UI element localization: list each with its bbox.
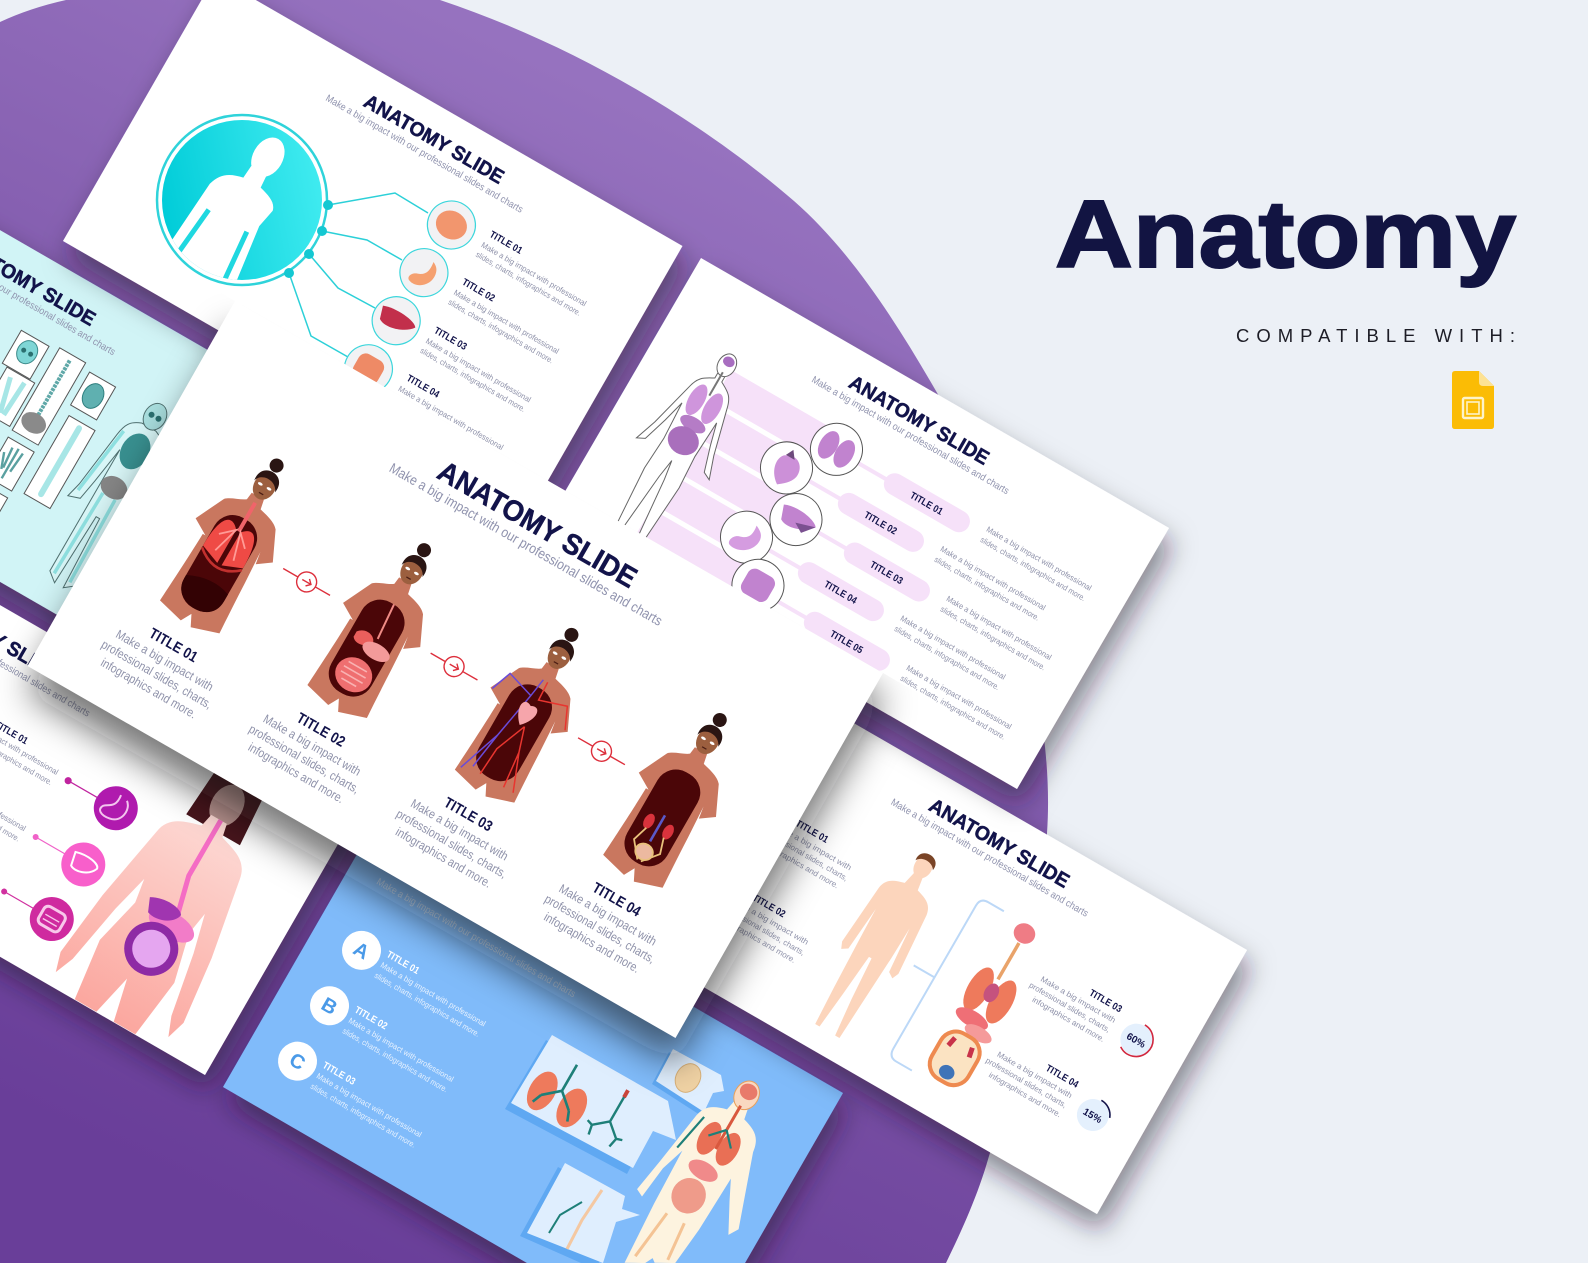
pill: title 04 bbox=[794, 558, 888, 625]
icon: liver bbox=[363, 288, 429, 353]
body figure with organs bbox=[44, 744, 304, 1052]
text block: title 04: Make a big impact with professional bbox=[397, 384, 505, 452]
description texts: slides, charts, infographics and more. bbox=[893, 624, 1001, 692]
text block: title 01: TITLE 01 bbox=[487, 229, 524, 257]
connector lines bbox=[289, 193, 428, 357]
figure 3: circulatory bbox=[442, 607, 614, 816]
icon: stomach bbox=[711, 502, 782, 573]
arrow 1 bbox=[278, 560, 335, 604]
progress ring: 60% bbox=[1114, 1017, 1159, 1063]
icon: intestine circle bbox=[22, 889, 82, 949]
pill: title 03: TITLE 03 bbox=[868, 560, 905, 587]
purple arch shape bbox=[0, 0, 1048, 1263]
icon: arm bones bbox=[0, 375, 24, 416]
text block: title 01: professional slides, charts, bbox=[99, 637, 214, 712]
text block: title 04: TITLE 04 bbox=[404, 373, 441, 401]
text block: title 03: slides, charts, infographics and more. bbox=[419, 346, 527, 414]
text block: title 03: TITLE 03 bbox=[432, 325, 469, 353]
text block: title 02: professional slides, charts, bbox=[722, 904, 806, 957]
description texts: Make a big impact with professional bbox=[945, 594, 1053, 662]
text block: title 01: infographics and more. bbox=[763, 841, 840, 890]
text block: title 02: TITLE 02 bbox=[750, 893, 787, 920]
description texts: slides, charts, infographics and more. bbox=[899, 674, 1007, 742]
pill: title 02 bbox=[834, 489, 928, 556]
heading: ANATOMY SLIDE bbox=[925, 795, 1073, 893]
text block: title 01: TITLE 01 bbox=[384, 949, 421, 977]
callout: lungs bbox=[505, 1035, 676, 1174]
text block: title 03: Make a big impact with professional bbox=[424, 337, 533, 404]
description texts: Make a big impact with professional bbox=[905, 663, 1013, 731]
slide: digestive body (white and magenta) bbox=[0, 541, 357, 1075]
lilac bands bbox=[634, 370, 896, 634]
text block: title 02: Make a big impact with professional bbox=[347, 1016, 455, 1084]
arrow 2 bbox=[426, 644, 482, 689]
text block: title 03 bbox=[386, 776, 527, 895]
icon: intestine bbox=[722, 550, 793, 621]
text block: title 03: slides, charts, infographics and more. bbox=[309, 1082, 417, 1150]
icon: skull bbox=[13, 337, 42, 368]
text block: title 02: infographics and more. bbox=[720, 915, 797, 965]
figure 2: digestive bbox=[295, 522, 467, 731]
outline figure bbox=[592, 334, 769, 556]
text block: title 03: Make a big impact with bbox=[408, 797, 511, 863]
organ stack bbox=[920, 913, 1051, 1092]
heading: ANATOMY SLIDE bbox=[360, 91, 508, 189]
text block: title 01: TITLE 01 bbox=[793, 818, 830, 846]
badge B: B bbox=[317, 993, 341, 1020]
text block: title 02: slides, charts, infographics and more. bbox=[341, 1026, 449, 1094]
slide: four body systems (center) bbox=[28, 301, 883, 1064]
text block: title 03: Make a big impact with bbox=[1039, 975, 1117, 1025]
male figure bbox=[800, 838, 958, 1047]
icon: stomach bbox=[391, 240, 457, 305]
icon: brain bbox=[801, 414, 872, 485]
text block: title 04: Make a big impact with bbox=[996, 1050, 1074, 1100]
subtitle: Make a big impact with our professional slides and charts bbox=[889, 797, 1090, 920]
subtitle: Make a big impact with our professional slides and charts bbox=[323, 93, 525, 216]
connector dots bbox=[284, 200, 333, 278]
text block: title 01: Make a big impact with bbox=[113, 627, 216, 694]
progress ring: 15%: 15% bbox=[1081, 1107, 1104, 1126]
text block: title 02 bbox=[717, 883, 818, 967]
icon: hand bones bbox=[0, 443, 24, 481]
bone cards bbox=[0, 327, 122, 554]
description texts: slides, charts, infographics and more. bbox=[939, 605, 1047, 672]
pill: title 03 bbox=[840, 538, 934, 606]
description texts: slides, charts, infographics and more. bbox=[979, 535, 1087, 603]
text block: title 01: TITLE 01 bbox=[146, 625, 200, 666]
text block: title 04: professional slides, charts, bbox=[984, 1056, 1068, 1110]
subtitle: Make a big impact with our professional slides and charts bbox=[809, 375, 1011, 497]
text block: title 03: TITLE 03 bbox=[1087, 988, 1124, 1015]
text block: title 02: TITLE 02 bbox=[460, 277, 497, 305]
text block: title 04: TITLE 04 bbox=[1043, 1063, 1080, 1091]
icon: spine and pelvis bbox=[17, 354, 81, 438]
figure 1: lungs bbox=[147, 438, 319, 647]
description texts: Make a big impact with professional bbox=[985, 525, 1093, 593]
subtitle: Make a big impact with our professional slides and charts bbox=[387, 460, 665, 629]
description texts: Make a big impact with professional bbox=[939, 544, 1047, 612]
slide: respiratory (blue) bbox=[223, 823, 843, 1263]
body figure with organs bbox=[602, 1058, 806, 1263]
icon: brain bbox=[419, 192, 484, 258]
heading: ANATOMY SLIDE bbox=[845, 372, 993, 470]
text block: title 04: infographics and more. bbox=[987, 1070, 1063, 1119]
text block: title 04 bbox=[978, 1035, 1080, 1119]
text block: title 02: Make a big impact with bbox=[729, 895, 810, 947]
text block: title 03: infographics and more. bbox=[393, 825, 494, 891]
progress ring: 15% bbox=[1071, 1092, 1115, 1137]
text block: title 03 bbox=[1022, 960, 1124, 1044]
text block: title 01: Make a big impact with professional bbox=[379, 961, 487, 1028]
text block: title 01: infographics and more. bbox=[98, 655, 199, 721]
callout: nerves bbox=[520, 1163, 640, 1263]
text block: title 02: Make a big impact with bbox=[261, 712, 363, 779]
pill: title 05 bbox=[800, 608, 894, 675]
text block: title 04: Make a big impact with bbox=[557, 882, 659, 949]
pill: title 02: TITLE 02 bbox=[862, 510, 899, 538]
badge B bbox=[303, 979, 356, 1032]
teal body circle bbox=[157, 115, 327, 297]
bracket bbox=[868, 886, 1004, 1071]
figure 4: urinary bbox=[590, 692, 762, 901]
progress ring: 60%: 60% bbox=[1124, 1031, 1147, 1051]
badge A: A bbox=[349, 938, 373, 964]
text block: title 03: infographics and more. bbox=[1031, 995, 1106, 1044]
pill: title 01 bbox=[880, 469, 974, 536]
pill: title 04: TITLE 04 bbox=[822, 579, 859, 607]
text block: title 03: professional slides, charts, bbox=[394, 807, 509, 881]
text block: title 03: professional slides, charts, bbox=[1027, 981, 1112, 1034]
icon: liver circle bbox=[53, 834, 113, 895]
description texts: Make a big impact with professional bbox=[899, 614, 1007, 682]
pill: title 01: TITLE 01 bbox=[908, 490, 945, 518]
text block: title 03: Make a big impact with professional bbox=[315, 1071, 423, 1139]
text block: title 02: infographics and more. bbox=[246, 740, 346, 806]
text block: title 03: TITLE 03 bbox=[320, 1060, 357, 1088]
text block: title 02: TITLE 02 bbox=[294, 710, 348, 751]
icon: google slides bbox=[1452, 371, 1494, 429]
text block: title 01: Make a big impact with bbox=[772, 821, 853, 872]
icon: stomach circle bbox=[86, 778, 146, 838]
text block: title 04 bbox=[534, 861, 675, 980]
slide: skeleton (cyan) bbox=[0, 94, 232, 628]
icon: heart bbox=[751, 432, 822, 503]
text block: title 01: professional slides, charts, bbox=[765, 829, 849, 883]
icon: long bones bbox=[41, 428, 79, 494]
text block: title 02: slides, charts, infographics and more. bbox=[447, 298, 555, 365]
text block: title 04: TITLE 04 bbox=[589, 879, 644, 921]
text block: title 01 bbox=[760, 808, 861, 892]
skeleton figure bbox=[27, 387, 193, 603]
text block: title 02: professional slides, charts, bbox=[246, 722, 362, 796]
callout: skull bbox=[652, 1049, 724, 1115]
text block: title 02: Make a big impact with professional bbox=[452, 288, 561, 356]
main title: Anatomy bbox=[1055, 181, 1516, 288]
text block: title 01: Make a big impact with professional bbox=[480, 240, 588, 308]
connectors bbox=[0, 777, 100, 912]
slide: male body and organs bbox=[629, 680, 1247, 1214]
text block: title 04: infographics and more. bbox=[541, 910, 642, 976]
icon: intestine bbox=[336, 336, 401, 402]
badge A bbox=[335, 924, 388, 977]
icon: ribs bbox=[78, 380, 108, 412]
text block: title 02 bbox=[238, 692, 379, 810]
badge C: C bbox=[285, 1049, 309, 1075]
icon: liver bbox=[760, 484, 831, 555]
pill: title 05: TITLE 05 bbox=[828, 629, 865, 657]
text block: title 04: professional slides, charts, bbox=[542, 892, 657, 966]
slide: body and organ list (top right, lilac) bbox=[549, 258, 1169, 789]
heading: ANATOMY SLIDE bbox=[432, 455, 642, 595]
text block: title 01: slides, charts, infographics and more. bbox=[373, 971, 481, 1039]
description texts: slides, charts, infographics and more. bbox=[933, 555, 1041, 623]
text block: title 02: TITLE 02 bbox=[352, 1005, 389, 1032]
text block: title 01: slides, charts, infographics and more. bbox=[474, 250, 583, 318]
text block: title 01 bbox=[91, 607, 232, 726]
compatible with label: COMPATIBLE WITH: bbox=[1236, 325, 1515, 346]
description texts bbox=[873, 510, 1093, 742]
text block: title 03: TITLE 03 bbox=[441, 794, 495, 835]
slide: organ connector (top, teal) bbox=[63, 0, 682, 510]
arrow 3 bbox=[573, 729, 630, 773]
subtitle: Make a big impact with our professional slides and charts bbox=[374, 877, 577, 1000]
badge C bbox=[271, 1035, 324, 1088]
